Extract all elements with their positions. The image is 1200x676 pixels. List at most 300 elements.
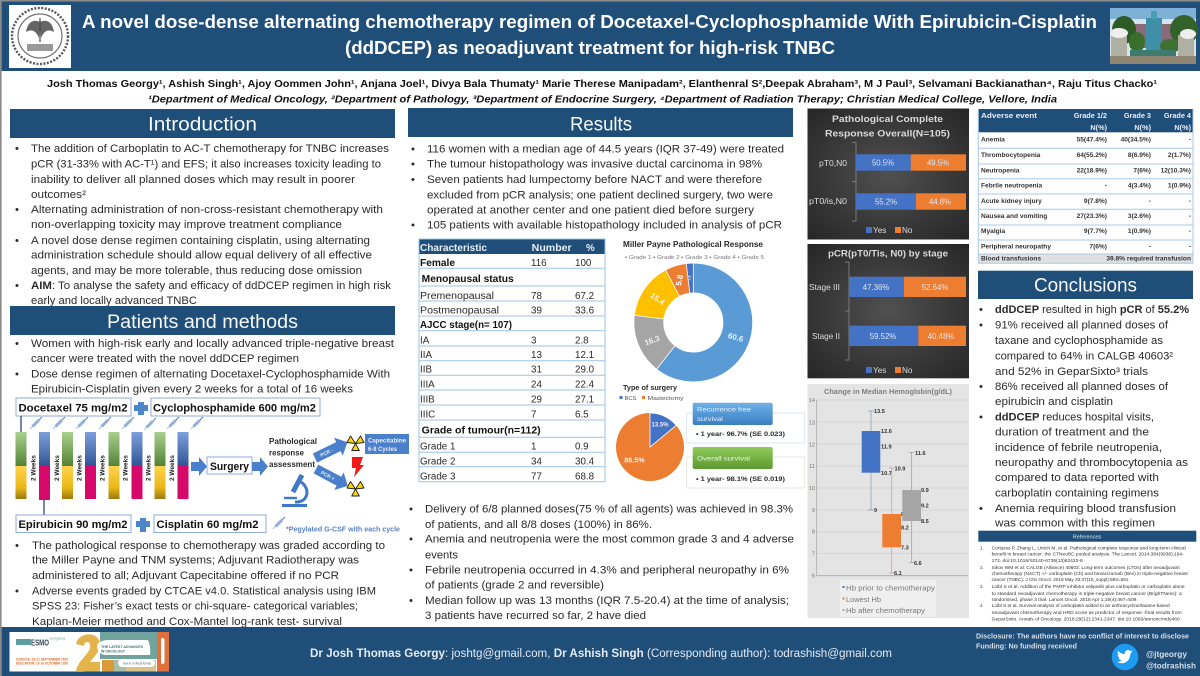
text block: results bullets: Seven patients had lumpectomy before NACT and were therefore	[427, 174, 762, 186]
hb prior box: 11.9	[881, 444, 892, 450]
legend	[840, 580, 936, 617]
chart: change in median hemoglobin: 9	[812, 508, 815, 514]
table: patient characteristics: 67.2	[575, 291, 594, 302]
text block: methods bullets continued: •	[15, 540, 19, 552]
text block: results bullets continued: •	[409, 595, 413, 607]
heading: patients and methods	[10, 306, 395, 335]
chart: Miller Payne donut: 16.3	[643, 334, 662, 348]
text block: reference list	[980, 546, 1188, 622]
arrow: to pathological assessment	[252, 457, 268, 476]
table: adverse events: Grade 4	[1164, 111, 1192, 120]
heading: introduction	[10, 109, 395, 138]
heading: introduction: Introduction	[148, 115, 257, 136]
table: patient characteristics: 30.4	[575, 456, 595, 468]
box: capecitabine	[365, 434, 409, 454]
panel: results	[408, 108, 805, 622]
hb after box	[902, 451, 929, 567]
text block: methods bullets continued: administered to all; Adjuvant Capecitabine offered if no PCR	[32, 570, 339, 582]
table: adverse events: 7(6%)	[1089, 244, 1107, 250]
table: patient characteristics: 34	[531, 456, 542, 468]
dose box: cisplatin: Cisplatin 60 mg/m2	[156, 519, 258, 531]
table: adverse events: 40(34.5%)	[1121, 136, 1151, 144]
chart: change in median hemoglobin: 6	[812, 574, 815, 580]
table: adverse events: 55(47.4%)	[1077, 136, 1107, 144]
table: patient characteristics: 31	[531, 364, 542, 376]
text block: methods bullets continued: •	[15, 586, 19, 598]
text block: conclusions bullets: Anemia requiring blood transfusion	[995, 503, 1176, 515]
table: adverse events: Anemia	[981, 136, 1005, 144]
logo: ESMO 2020 congress banner: SCIENCE: 19-21 SEPTEMBER 2020	[16, 658, 68, 662]
text block: methods bullets: cancer were treated with the novel ddDCEP regimen	[31, 353, 299, 365]
table: adverse events: 9(7.8%)	[1084, 198, 1107, 205]
dose box: epirubicin	[16, 515, 131, 532]
text block: methods bullets continued: the Miller Payne and TNM systems; Adjuvant Radiotherapy was	[32, 554, 359, 566]
table: adverse events: -	[1105, 182, 1107, 190]
labels: 2 weeks intervals	[30, 455, 176, 481]
lowest hb box: 7.3	[901, 546, 909, 552]
text block: results bullets: •	[411, 158, 415, 170]
callout: recurrence free survival: • 1 year- 96.7% (SE 0.023)	[696, 431, 785, 438]
text block: introduction bullets: pCR (31-33% with AC-T¹) and EFS; it also increases toxicity leading to	[31, 158, 381, 170]
chart: pCR by stage: Stage II	[812, 332, 840, 341]
logo: ESMO 2020 congress banner: now in a virtual format	[123, 662, 151, 666]
box: surgery	[207, 457, 252, 474]
text: pathological response assessment	[269, 437, 317, 469]
arrow: PCR positive	[311, 460, 352, 495]
icons: syringes	[30, 417, 203, 430]
logo: ESMO 2020 congress banner: IN ONCOLOGY	[101, 650, 125, 654]
chart: pathological complete response overall: 50.5%	[872, 158, 894, 168]
text: pathological response assessment: assessment	[269, 460, 315, 469]
text block: methods bullets: Epirubicin-Cisplatin given every 2 weeks for a total of 16 weeks	[31, 384, 353, 396]
chart: type of surgery pie: 86.5%	[624, 456, 645, 464]
text block: methods bullets: •	[15, 368, 19, 380]
table: adverse events: Myalgia	[981, 228, 1006, 235]
table: adverse events: Thrombocytopenia	[981, 152, 1041, 159]
box: capecitabine: Capecitabine	[368, 438, 406, 444]
table: patient characteristics: Characteristic	[420, 243, 488, 254]
footer banner	[2, 627, 1200, 676]
lowest hb box: 8.8	[901, 512, 909, 518]
treatment schema diagram	[16, 398, 409, 534]
chemotherapy cycle bars	[16, 432, 188, 500]
authors and affiliations	[47, 79, 1157, 106]
heading: references: References	[1073, 535, 1102, 541]
chart: type of surgery pie: 13.5%	[651, 422, 669, 428]
chart: change in median hemoglobin: 12	[809, 442, 815, 448]
text block: results bullets continued: Febrile neutropenia occurred in 4.3% and peripheral neuropathy in 6%	[425, 564, 789, 576]
text block: introduction bullets: Alternating administration of non-cross-resistant chemotherapy with	[31, 204, 383, 216]
text block: reference list: 1.	[980, 546, 984, 550]
table: adverse events: -	[1189, 244, 1191, 250]
text block: reference list: randomised, phase 3 trial. Lancet Oncol. 2018 Apr 1;19(4):497=509.	[992, 597, 1138, 602]
text block: results bullets: operated at another center and one patient died before surgery	[427, 204, 754, 216]
disclosure and funding	[976, 632, 1189, 650]
logo: Christian Medical College emblem	[9, 5, 71, 68]
chart: type of surgery pie: BCS	[624, 396, 637, 402]
chart: change in median hemoglobin: 13	[809, 420, 815, 426]
twitter handles: @jtgeorgy	[1146, 649, 1187, 659]
text block: methods bullets continued: The pathological response to chemotherapy was graded according to	[32, 540, 385, 552]
text block: introduction bullets: A novel dose dense regimen containing cisplatin, using alternating	[31, 235, 370, 247]
table: adverse events: Blood transfusions	[981, 256, 1041, 262]
box: surgery: Surgery	[210, 461, 250, 473]
table: patient characteristics: IIIB	[420, 394, 435, 406]
text block: methods bullets: Dose dense regimen of alternating Docetaxel-Cyclophosphamide With	[31, 368, 390, 380]
table: patient characteristics: Menopausal status	[422, 274, 514, 285]
text block: conclusions bullets: was common with this regimen	[994, 518, 1155, 530]
text block: introduction bullets: AIM: To analyse the safety and efficacy of ddDCEP regimen in high risk	[31, 280, 391, 292]
text block: methods bullets: •	[15, 338, 19, 350]
panel: conclusions	[978, 271, 1193, 530]
table: adverse events: Febrile neutropenia	[981, 182, 1043, 190]
table: patient characteristics: 100	[575, 258, 592, 269]
text block: results bullets: 116 women with a median age of 44.5 years (IQR 37-49) were treated	[427, 144, 784, 156]
dose box: cyclophosphamide: Cyclophosphamide 600 mg/m2	[153, 402, 316, 414]
text block: methods bullets continued: SPSS 23: Fisher’s exact tests or chi-square- categorical variables;	[32, 600, 358, 612]
text block: reference list: Loibl S et al. Addition of the PARP inhibitor veliparib plus carboplatin or carboplatin alone	[992, 584, 1185, 589]
table: adverse events: 7(6%)	[1133, 168, 1151, 174]
labels: 2 weeks intervals: 2 Weeks	[146, 455, 152, 481]
icon: microscope	[282, 475, 307, 506]
title	[82, 11, 1097, 58]
chart: pathological complete response overall: 44.8%	[929, 198, 951, 206]
text block: introduction bullets: •	[15, 280, 19, 292]
lowest hb box: 8.2	[901, 526, 909, 532]
table: patient characteristics: 24	[531, 380, 542, 390]
icon: radiation (bottom)	[347, 482, 364, 496]
table: patient characteristics: IIIA	[420, 380, 435, 390]
chart: pCR by stage: Stage III	[809, 283, 840, 292]
icon: plus	[134, 402, 148, 415]
text block: results bullets continued: Anemia and neutropenia were the most common grade 3 and 4 adverse	[425, 534, 794, 546]
chart: pathological complete response overall: pT0/is,N0	[809, 197, 847, 206]
text block: results bullets continued: of patients (grade 2 and reversible)	[425, 580, 604, 592]
logo: ESMO 2020 congress banner: congress	[49, 636, 65, 640]
chart: pathological complete response overall: Pathological Complete	[832, 114, 943, 125]
panel: introduction	[10, 109, 395, 307]
table: adverse events: 3(2.6%)	[1128, 213, 1151, 220]
table: patient characteristics: IA	[420, 336, 430, 346]
chart: change in median hemoglobin: Change in Median Hemoglobin(g/dL)	[824, 387, 953, 396]
text block: introduction bullets: administration schedule should allow equal delivery of all effective	[31, 250, 372, 262]
text block: introduction bullets: •	[15, 235, 19, 247]
text block: reference list: to standard neoadjuvant chemotherapy in triple-negative breast cancer (BrighTNess): a	[992, 591, 1182, 596]
labels: 2 weeks intervals: 2 Weeks	[100, 455, 106, 481]
callout: overall survival: • 1 year- 98.1% (SE 0.019)	[696, 476, 785, 483]
table: patient characteristics: 7	[531, 410, 536, 420]
text block: reference list: benefit in breast cancer: the CTNeoBC pooled analysis. The Lancet. 2014;384(9938):164-	[992, 552, 1184, 556]
panel: references	[978, 531, 1196, 622]
table: adverse events: 9(7.7%)	[1084, 228, 1107, 235]
table: adverse events	[978, 109, 1193, 263]
table: adverse events: -	[1149, 244, 1151, 250]
table: patient characteristics: 39	[531, 306, 542, 316]
text block: introduction bullets	[15, 143, 391, 307]
text block: conclusions bullets: epirubicin and cisplatin	[995, 396, 1113, 408]
icon: twitter	[1112, 644, 1138, 670]
heading: conclusions: Conclusions	[1034, 276, 1137, 297]
text block: methods bullets continued: Adverse events graded by CTCAE v4.0. Statistical analysis using IBM	[32, 586, 376, 598]
text block: conclusions bullets: incidence of febrile neutropenia,	[995, 442, 1162, 454]
table: adverse events: 4(3.4%)	[1128, 182, 1151, 190]
table: adverse events: 2(1.7%)	[1168, 152, 1191, 159]
logo: ESMO 2020 congress banner: THE LATEST ADVANCES	[101, 645, 143, 649]
text block: introduction bullets: •	[15, 143, 19, 155]
text block: conclusions bullets: •	[979, 412, 983, 424]
chart: Miller Payne donut: ▪ Grade 1 ▪ Grade 2 ▪ Grade 3 ▪ Grade 4 ▪ Grade 5	[625, 255, 764, 261]
hb after box: 6.6	[914, 561, 922, 567]
text block: reference list: Sikov WM et al. CALGB (Alliance) 40603: Long-term outcomes (LTOs) after neoadjuvant	[992, 565, 1180, 570]
icon: radiation (top)	[347, 436, 364, 450]
text block: conclusions bullets	[979, 304, 1189, 530]
disclosure and funding: Disclosure: The authors have no conflict of interest to disclose	[976, 632, 1189, 640]
table: patient characteristics: 22.4	[575, 380, 595, 390]
table: patient characteristics: %	[586, 243, 595, 254]
text block: conclusions bullets: •	[979, 381, 983, 393]
table: patient characteristics: Premenopausal	[420, 291, 494, 302]
text block: reference list: 172. doi:10.1016/S0140-6736(13)62422-8	[992, 558, 1083, 563]
table: adverse events: -	[1189, 136, 1191, 144]
table: adverse events: Grade 3	[1124, 111, 1151, 120]
table: patient characteristics: Grade 2	[420, 456, 455, 468]
disclosure and funding: Funding: No funding received	[976, 642, 1077, 650]
text block: introduction bullets: early and locally advanced TNBC	[31, 295, 197, 307]
lowest hb box: 10.9	[894, 466, 905, 472]
table: patient characteristics: 33.6	[575, 306, 595, 316]
chart: pCR by stage: 40.48%	[928, 332, 954, 341]
table: patient characteristics: 12.1	[575, 350, 594, 361]
text block: conclusions bullets: ddDCEP reduces hospital visits,	[995, 412, 1154, 424]
text block: methods bullets	[15, 338, 395, 396]
table: patient characteristics: 27.1	[575, 394, 594, 406]
chart: pCR by stage: pCR(pT0/Tis, N0) by stage	[828, 249, 948, 259]
text block: introduction bullets: outcomes²	[31, 189, 86, 201]
dose box: docetaxel	[16, 398, 131, 416]
table: patient characteristics: 0.9	[575, 442, 589, 452]
text block: results bullets: The tumour histopathology was invasive ductal carcinoma in 98%	[427, 158, 762, 170]
chart: Miller Payne donut	[623, 240, 764, 369]
table: patient characteristics: 77	[531, 472, 542, 482]
box: capecitabine: 6-8 Cycles	[368, 446, 397, 453]
contact details: Dr Josh Thomas Georgy: joshtg@gmail.com, Dr Ashish Singh (Corresponding author): todrashish@gmail.com	[310, 646, 892, 660]
text block: results bullets continued: Delivery of 6/8 planned doses(75 % of all agents) was achieved in 98.3%	[425, 504, 793, 516]
text block: conclusions bullets: taxane and cyclophosphamide as	[995, 335, 1163, 347]
heading: conclusions	[978, 271, 1193, 299]
chart: pathological complete response overall: No	[902, 226, 913, 235]
text block: reference list: Loibl S et al. Survival analysis of carboplatin added to an anthracycline/taxane-based	[992, 603, 1170, 608]
text block: reference list: 3.	[980, 584, 984, 589]
labels: 2 weeks intervals: 2 Weeks	[30, 455, 38, 481]
legend: Hb prior to chemotherapy	[846, 584, 935, 593]
chart: pCR by stage: No	[902, 366, 913, 375]
dose box: epirubicin: Epirubicin 90 mg/m2	[18, 519, 128, 531]
callout: overall survival: Overall survival	[697, 456, 751, 462]
table: patient characteristics: IIIC	[420, 410, 435, 420]
text block: conclusions bullets: compared to data reported with	[995, 472, 1159, 484]
table: patient characteristics: Grade of tumour(n=112)	[422, 426, 541, 436]
text block: results bullets continued: events	[425, 550, 458, 562]
arrow: PCR positive: PCR +	[319, 470, 335, 482]
hb after box: 9.2	[921, 504, 929, 510]
table: adverse events: 8(6.9%)	[1128, 152, 1151, 159]
table: adverse events: -	[1189, 198, 1191, 205]
table: patient characteristics: Grade 1	[420, 442, 455, 452]
arrow: PCR negative	[311, 433, 352, 467]
table: patient characteristics: 29.0	[575, 364, 595, 376]
lowest hb box	[882, 466, 909, 577]
table: patient characteristics: 68.8	[575, 472, 595, 482]
table: adverse events: N(%)	[1134, 123, 1152, 132]
text block: reference list: GeparSixto. Annals of Oncology. 2018;29(12):2341-2347. doi:10.1093/annonc/mdy460	[992, 616, 1180, 622]
text block: conclusions bullets: duration of treatment and the	[995, 426, 1149, 438]
text block: results bullets continued	[409, 504, 794, 622]
heading: references	[978, 531, 1196, 542]
legend: Lowest Hb	[846, 595, 881, 604]
chart: Miller Payne donut: 1.9	[687, 275, 692, 280]
chart: pCR by stage: 59.52%	[870, 332, 896, 341]
chart: Miller Payne donut: 15.4	[648, 291, 667, 307]
hb prior box	[862, 409, 892, 514]
authors and affiliations: Josh Thomas Georgy¹, Ashish Singh¹, Ajoy Oommen John¹, Anjana Joel¹, Divya Bala Thumaty¹ Marie Therese Manipadam², Elanthenral S²,Deepak Abraham³, M J Paul³, Selvamani Backianathan⁴, Raju Titus Chacko¹	[47, 79, 1157, 90]
table: adverse events: 27(23.3%)	[1077, 213, 1107, 220]
heading: patients and methods: Patients and methods	[107, 312, 298, 333]
table: patient characteristics: 1	[531, 442, 536, 452]
text block: conclusions bullets: 91% received all planned doses of	[995, 320, 1169, 332]
table: adverse events: 22(18.9%)	[1077, 168, 1107, 174]
chart: Miller Payne donut: 5.8	[674, 273, 685, 287]
text block: reference list: chemotherapy (NACT) +/- carboplatin (Cb) and bevacizumab (Bev) in triple-negative breast	[992, 571, 1188, 576]
table: patient characteristics: IIB	[420, 364, 432, 376]
header banner	[2, 1, 1200, 71]
table: adverse events: Grade 1/2	[1074, 111, 1107, 120]
text block: results bullets: •	[411, 220, 415, 232]
chart: type of surgery pie: Mastectomy	[648, 396, 684, 402]
table: patient characteristics: 116	[531, 258, 547, 269]
chart: pathological complete response overall	[808, 108, 969, 240]
text block: conclusions bullets: •	[979, 304, 983, 316]
dose box: cisplatin	[154, 515, 266, 532]
text block: results bullets: 105 patients with available histopathology included in analysis of pCR	[427, 220, 782, 232]
hb prior box: 10.7	[881, 471, 892, 477]
logo: ESMO 2020 congress banner: ESMO	[31, 638, 49, 648]
photo: college building	[1110, 8, 1198, 64]
callout: overall survival	[687, 447, 805, 488]
callout: recurrence free survival: survival	[697, 416, 724, 423]
icon: syringe G-CSF	[273, 517, 285, 529]
table: patient characteristics: AJCC stage(n= 107)	[420, 320, 512, 331]
text block: results bullets: excluded from pCR analysis; one patient declined surgery, two were	[427, 190, 773, 202]
text block: methods bullets continued: Kaplan-Meier method and Cox-Mantel log-rank test- survival	[32, 616, 342, 628]
chart: change in median hemoglobin: 11	[809, 464, 815, 470]
text: pathological response assessment: Pathological	[269, 437, 317, 446]
table: patient characteristics: IIA	[420, 350, 432, 361]
table: adverse events: Peripheral neuropathy	[981, 244, 1051, 250]
heading: results	[408, 108, 793, 137]
text block: conclusions bullets: and 52% in GeparSixto³ trials	[995, 366, 1148, 378]
text block: reference list: cancer (TNBC). J Clin Oncol. 2019 May 20;37(15_suppl):593=591.	[992, 577, 1130, 582]
table: patient characteristics: Grade 3	[420, 472, 456, 482]
callout: recurrence free survival	[687, 403, 805, 443]
table: patient characteristics: 78	[531, 291, 542, 302]
chart: pathological complete response overall: Yes	[873, 226, 886, 235]
table: adverse events: Adverse event	[981, 111, 1038, 120]
hb after box: 11.6	[915, 451, 926, 457]
text block: results bullets: •	[411, 144, 415, 156]
table: adverse events: 1(0.9%)	[1168, 182, 1191, 190]
text block: methods bullets continued	[15, 540, 385, 628]
lowest hb box: 6.1	[894, 571, 902, 577]
text block: reference list: neoadjuvant chemotherapy and HRD score as predictor of response -final results from	[992, 610, 1182, 615]
chart: pathological complete response overall: 55.2%	[875, 198, 897, 206]
text block: results bullets	[411, 144, 784, 232]
text block: reference list: Cortazar P, Zhang L, Untch M, et al. Pathological complete response and long-term clinical	[992, 546, 1186, 550]
table: patient characteristics: 2.8	[575, 336, 589, 346]
logo: ESMO 2020 congress banner	[10, 632, 169, 672]
arrow: to surgery	[191, 457, 207, 476]
dose box: docetaxel: Docetaxel 75 mg/m2	[18, 402, 128, 414]
table: adverse events: 12(10.3%)	[1161, 168, 1191, 174]
note: pegylated G-CSF: *Pegylated G-CSF with each cycle	[286, 526, 400, 534]
text block: conclusions bullets: compared to 64% in CALGB 40603²	[995, 350, 1173, 362]
panel: patients and methods	[10, 306, 409, 628]
twitter handles: @todrashish	[1146, 660, 1196, 670]
chart: change in median hemoglobin: 10	[809, 486, 815, 492]
text block: introduction bullets: •	[15, 204, 19, 216]
text block: reference list: 4.	[980, 603, 984, 608]
labels: 2 weeks intervals: 2 Weeks	[54, 455, 61, 481]
chart: change in median hemoglobin: 7	[812, 552, 815, 558]
arrow: PCR negative: PCR -	[320, 447, 335, 459]
chart: pathological complete response overall: Response Overall(N=105)	[825, 129, 950, 140]
table: adverse events: -	[1189, 228, 1191, 235]
title: A novel dose-dense alternating chemotherapy regimen of Docetaxel-Cyclophosphamide With Epirubicin-Cisplatin	[82, 11, 1097, 32]
title: (ddDCEP) as neoadjuvant treatment for high-risk TNBC	[345, 37, 835, 58]
text block: conclusions bullets: 86% received all planned doses of	[995, 381, 1169, 393]
table: adverse events: Neutropenia	[981, 168, 1020, 174]
logo: ESMO 2020 congress banner: EDUCATION: 16-18 OCTOBER 2020	[16, 662, 68, 666]
table: adverse events: Acute kidney injury	[981, 198, 1042, 205]
chart: pCR by stage: 52.64%	[922, 283, 948, 292]
table: adverse events: 39.8% required transfusion	[1106, 256, 1191, 262]
text block: results bullets continued: •	[409, 564, 413, 576]
table: patient characteristics: Number	[532, 243, 572, 254]
chart: pCR by stage	[808, 244, 969, 378]
chart: Miller Payne donut: 60.6	[727, 331, 745, 344]
table: patient characteristics: Postmenopausal	[420, 306, 499, 316]
text block: reference list: 2.	[980, 565, 984, 570]
table: adverse events: Nausea and vomiting	[981, 213, 1047, 220]
text block: introduction bullets: The addition of Carboplatin to AC-T chemotherapy for TNBC increases	[31, 143, 389, 155]
chart: change in median hemoglobin	[808, 384, 969, 618]
authors and affiliations: ¹Department of Medical Oncology, ²Department of Pathology, ³Department of Endocrine Surgery, ⁴Department of Radiation Therapy; Christian Medical College, Vellore, India	[148, 94, 1058, 106]
hb prior box: 12.6	[881, 429, 892, 435]
labels: 2 weeks intervals: 2 Weeks	[122, 455, 130, 481]
text block: introduction bullets: non-overlapping toxicity may improve treatment compliance	[31, 219, 342, 231]
chart: pathological complete response overall: 49.5%	[927, 158, 949, 168]
labels: 2 weeks intervals: 2 Weeks	[76, 455, 84, 481]
chart: type of surgery pie: Type of surgery	[623, 383, 677, 392]
table: patient characteristics: 6.5	[575, 410, 589, 420]
text block: conclusions bullets: carboplatin containing regimens	[995, 488, 1159, 500]
table: patient characteristics: 29	[531, 394, 542, 406]
callout: recurrence free survival: Recurrence free	[697, 406, 751, 414]
chart: pathological complete response overall: pT0,N0	[819, 159, 847, 168]
text block: introduction bullets: agents, and may be more tolerable, thus reducing dose omission	[31, 265, 362, 277]
text block: results bullets continued: Median follow up was 13 months (IQR 7.5-20.4) at the time of analysis;	[425, 595, 789, 607]
text: pathological response assessment: response	[269, 448, 305, 458]
table: adverse events: N(%)	[1174, 123, 1192, 132]
